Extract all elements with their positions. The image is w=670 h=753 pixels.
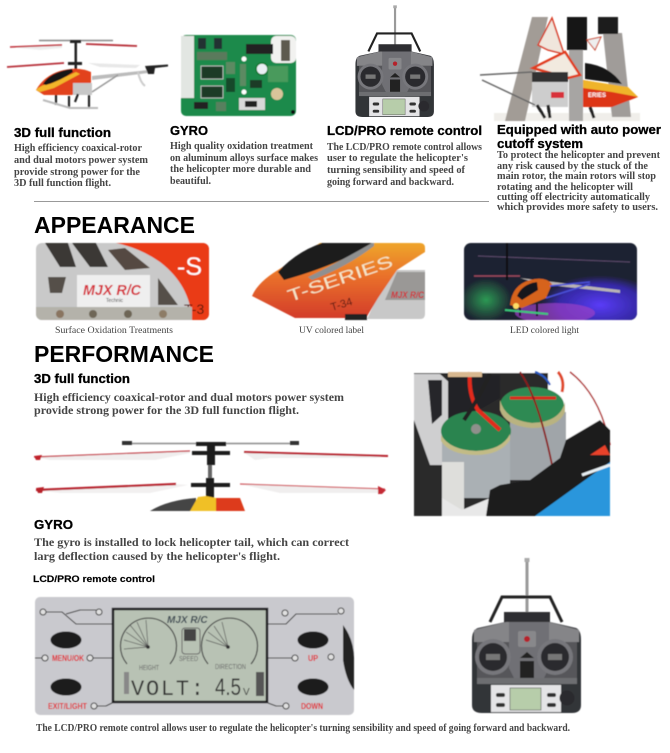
panel: LCD control panel: DOWN	[301, 702, 323, 711]
text block: LCD/PRO remote control: turning sensibility and speed of	[327, 165, 466, 176]
text block: auto power cutoff: cutting off electricity automatically	[497, 192, 650, 203]
photo: UV colored label: MJX R/C	[391, 290, 424, 300]
icon: remote control	[355, 5, 434, 117]
text block: performance 3D full function	[34, 371, 344, 417]
icon: auto power cutoff photo	[480, 17, 640, 121]
panel: LCD control panel: MENU/OK	[52, 654, 84, 663]
text block: 3D full function: 3D full function	[14, 125, 111, 140]
text block: performance 3D full function: 3D full function	[34, 371, 130, 386]
panel: LCD control panel: HEIGHT	[139, 665, 160, 672]
panel: LCD control panel: DIRECTION	[215, 664, 246, 671]
icon: gyro circuit board	[181, 35, 296, 116]
panel: LCD control panel: UP	[308, 654, 319, 663]
text block: LCD/PRO remote control: LCD/PRO remote control	[327, 123, 482, 138]
panel: LCD control panel: V	[243, 687, 250, 698]
text block: performance 3D full function: provide strong power for the 3D full function flight.	[34, 405, 299, 417]
text block: 3D full function: and dual motors power system	[14, 155, 149, 166]
heading: LCD/PRO remote control: LCD/PRO remote control	[33, 574, 155, 585]
photo: coaxial rotors	[34, 441, 388, 511]
text block: performance GYRO	[34, 517, 349, 563]
panel: LCD control panel	[35, 597, 354, 715]
photo: surface oxidation: MJX R/C	[83, 282, 142, 299]
text block: GYRO: beautiful.	[170, 176, 211, 187]
heading: APPEARANCE: APPEARANCE	[34, 212, 195, 238]
text block: LCD/PRO remote control	[327, 123, 482, 188]
text block: 3D full function	[14, 125, 149, 189]
text block: GYRO: GYRO	[170, 123, 208, 138]
text block: performance GYRO: larg deflection caused by the helicopter's flight.	[34, 551, 280, 563]
text block: auto power cutoff: rotating and the helicopter will	[497, 182, 633, 193]
heading: PERFORMANCE: PERFORMANCE	[34, 341, 214, 367]
text block: GYRO: on aluminum alloys surface makes	[170, 153, 318, 164]
icon: helicopter photo	[7, 40, 168, 108]
text block: auto power cutoff: any risk caused by the stuck of the	[497, 161, 649, 172]
text block: 3D full function: 3D full function flight.	[14, 178, 112, 189]
photo: surface oxidation: -S	[177, 253, 202, 281]
caption: UV colored label: UV colored label	[299, 326, 364, 336]
panel: LCD control panel: VOLT:	[131, 677, 204, 702]
photo: dual motors	[414, 372, 610, 516]
panel: LCD control panel: MJX R/C	[167, 615, 208, 626]
text block: GYRO: the helicopter more durable and	[170, 164, 311, 175]
text block: auto power cutoff: cutoff system	[497, 136, 583, 151]
text block: 3D full function: High efficiency coaxical-rotor	[14, 143, 143, 154]
text block: LCD/PRO remote control: user to regulate the helicopter's	[327, 153, 468, 164]
text block: LCD/PRO remote control: going forward and backward.	[327, 177, 454, 188]
text block: auto power cutoff: main rotor, the main rotors will stop	[497, 171, 656, 182]
photo: surface oxidation	[36, 243, 209, 320]
icon: large remote control	[472, 558, 581, 713]
text block: auto power cutoff: which provides more safety to users.	[497, 202, 659, 213]
text block: performance 3D full function: High efficiency coaxical-rotor and dual motors power system	[34, 392, 344, 404]
text block: GYRO	[170, 123, 318, 187]
text block: auto power cutoff: To protect the helicopter and prevent	[497, 150, 661, 161]
text block: GYRO: High quality oxidation treatment	[170, 141, 314, 152]
photo: UV colored label: T-SERIES	[285, 252, 395, 306]
text block: performance GYRO: GYRO	[34, 517, 73, 532]
text block: auto power cutoff	[497, 122, 661, 213]
photo: LED colored light	[463, 242, 638, 321]
panel: LCD control panel: EXIT/LIGHT	[48, 702, 87, 711]
photo: UV colored label	[252, 243, 425, 320]
text block: performance GYRO: The gyro is installed to lock helicopter tail, which can correct	[34, 537, 349, 549]
icon: auto power cutoff photo: ERIES	[588, 93, 606, 99]
text block: LCD/PRO remote control: The LCD/PRO remote control allows	[327, 142, 482, 153]
text block: 3D full function: provide strong power for the	[14, 167, 141, 178]
caption: remote control: The LCD/PRO remote control allows user to regulate the helicopter's turning sensibility and speed of going forward and backward.	[36, 723, 570, 734]
caption: LED colored light: LED colored light	[510, 326, 579, 336]
photo: UV colored label: T-34	[329, 296, 354, 314]
panel: LCD control panel: SPEED	[179, 656, 198, 663]
panel: LCD control panel: 4.5	[215, 674, 241, 701]
photo: surface oxidation: Technic	[106, 298, 123, 304]
photo: surface oxidation: T-3	[184, 301, 204, 317]
caption: surface oxidation: Surface Oxidation Treatments	[55, 325, 173, 336]
text block: auto power cutoff: Equipped with auto power	[497, 122, 661, 137]
